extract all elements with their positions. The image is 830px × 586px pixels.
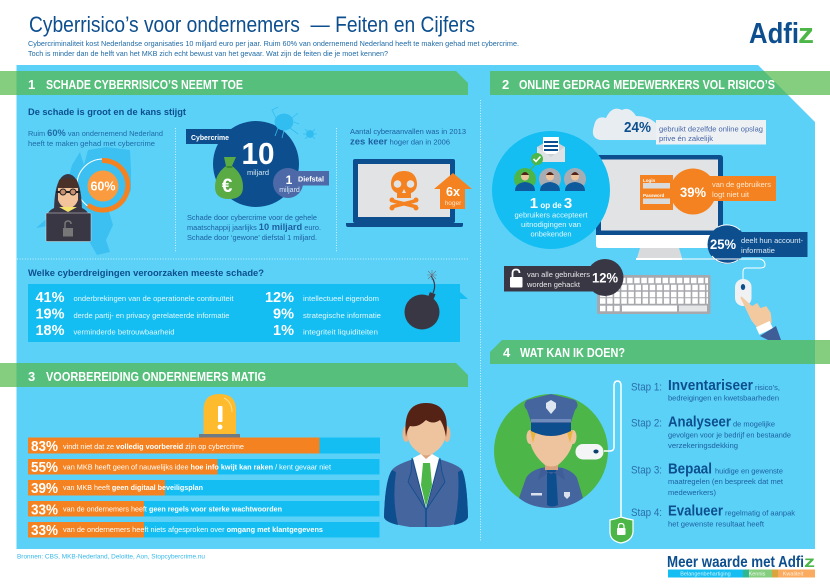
text: zes keer hoger xyxy=(350,127,466,148)
callout: 25% xyxy=(708,225,808,264)
illustration: businessman xyxy=(384,403,468,527)
dividers xyxy=(17,100,480,541)
stat list: derde partij- en privacy gerelateerde informatie xyxy=(74,311,230,320)
illustration: cloud with 24% xyxy=(593,109,766,144)
step 2: Stap 2: xyxy=(631,418,662,430)
circle: 1 op de 3: 1 op de 3 xyxy=(530,195,572,212)
bar: 33% klantgegevens xyxy=(28,522,380,539)
callout: 39%: Login xyxy=(643,178,655,183)
callout: 25%: informatie xyxy=(741,246,775,255)
step 3: medewerkers) xyxy=(668,488,717,497)
icon: money bag xyxy=(215,157,243,199)
bar: 33% wachtwoorden: 33% xyxy=(31,502,58,518)
bar: 83% xyxy=(28,438,380,455)
step 3 xyxy=(631,462,784,497)
background panel xyxy=(16,65,815,549)
logo: Adfiz: z xyxy=(798,18,814,50)
footer logo: Meer waarde met Adfiz: Belangenbehartiging xyxy=(680,572,731,578)
circle: diefstal 1 miljard: Diefstal xyxy=(298,176,324,184)
text: 60 percent: Ruim 60% van ondernemend Nederland xyxy=(28,128,163,139)
callout: 39% xyxy=(640,168,776,214)
logo: Adfiz: Adfi xyxy=(749,18,799,50)
footer logo: Meer waarde met Adfiz: Kwaliteit xyxy=(783,572,804,578)
icon: alarm light xyxy=(199,394,240,439)
circle: diefstal 1 miljard: miljard xyxy=(279,187,300,194)
step 4 xyxy=(631,504,795,528)
heading: schade: De schade is groot en de kans stijgt xyxy=(28,107,187,118)
illustration: cloud with 24%: 24% xyxy=(624,120,651,136)
icon: laptop with skull xyxy=(346,159,463,227)
footer logo: Meer waarde met Adfiz xyxy=(667,554,815,578)
bar chart: voorbereiding xyxy=(28,438,380,539)
banner: section 3 xyxy=(0,363,468,387)
icon: mouse and hand xyxy=(682,259,781,340)
banner: section 4 xyxy=(490,340,830,364)
banner: section 3: VOORBEREIDING ONDERNEMERS MATIG xyxy=(46,369,266,384)
intro text xyxy=(28,39,519,58)
panel: cyberdreigingen xyxy=(28,284,468,342)
stat list: strategische informatie xyxy=(303,311,381,320)
stat list: 12% xyxy=(265,290,294,306)
callout: 39%: logt niet uit xyxy=(712,190,750,199)
intro text: Cybercriminaliteit kost Nederlandse organisaties 10 miljard euro per jaar. Ruim 60% van ondernemend Nederland heeft te maken gehad met cybercrime. xyxy=(28,39,519,48)
source line: Bronnen: CBS, MKB-Nederland, Deloitte, Aon, Stopcybercrime.nu xyxy=(17,554,205,560)
circle: cybercrime 10 miljard: 10 xyxy=(242,136,274,171)
bar: 33% klantgegevens: van de ondernemers heeft niets afgesproken over omgang met klantgegevens xyxy=(63,525,323,534)
text: schade door cybercrime: maatschappij jaarlijks 10 miljard euro. xyxy=(187,222,321,233)
stat list xyxy=(35,290,381,339)
circle: 1 op de 3: uitnodigingen van xyxy=(521,220,581,229)
circle: 1 op de 3: gebruikers accepteert xyxy=(514,210,588,220)
callout: 39%: 39% xyxy=(680,184,707,200)
callout: 12%: worden gehackt xyxy=(526,280,581,289)
text: 60 percent xyxy=(28,128,163,148)
heading: cyberdreigingen: Welke cyberdreigingen veroorzaken meeste schade? xyxy=(28,268,264,279)
callout: 12%: 12% xyxy=(592,270,618,286)
step 3: huidige en gewenste xyxy=(715,466,783,476)
banner: section 2: ONLINE GEDRAG MEDEWERKERS VOL RISICO’S xyxy=(519,77,775,92)
banner: section 4: WAT KAN IK DOEN? xyxy=(520,345,625,360)
banner: section 1 xyxy=(0,71,468,95)
icon: hacker xyxy=(46,174,91,242)
bar: 55% xyxy=(28,459,380,476)
stat list: 18% xyxy=(35,323,65,339)
stat list: 1% xyxy=(273,323,294,339)
text: schade door cybercrime: Schade door cybercrime voor de gehele xyxy=(187,213,317,222)
callout: 25%: deelt hun account- xyxy=(741,236,803,245)
donut chart: 60% xyxy=(77,159,129,211)
title: Cyberrisico’s voor ondernemers — Feiten en Cijfers xyxy=(29,12,475,37)
connector line with mouse xyxy=(576,381,621,520)
bar: 39%: 39% xyxy=(31,481,58,497)
step 1: Stap 1: xyxy=(631,382,662,394)
text: schade door cybercrime: Schade door ‘gewone’ diefstal 1 miljard. xyxy=(187,233,317,242)
bar: 39% xyxy=(28,480,380,497)
circle: cybercrime 10 miljard: miljard xyxy=(247,168,269,177)
banner: section 4: 4 xyxy=(503,345,511,360)
step 3: maatregelen (en bespreek dat met xyxy=(668,477,784,486)
donut chart: 60%: 60% xyxy=(90,180,116,194)
illustration: cloud with 24%: gebruikt dezelfde online opslag xyxy=(659,124,763,134)
illustration: police officer xyxy=(494,394,608,508)
text: schade door cybercrime xyxy=(187,213,321,242)
circle: 1 op de 3 xyxy=(492,131,610,249)
bar: 39%: van MKB heeft geen digitaal beveiligsplan xyxy=(63,483,203,492)
stat list: 41% xyxy=(35,290,65,306)
icon: shield lock xyxy=(610,517,633,543)
step 2 xyxy=(631,414,791,450)
map: Nederland xyxy=(36,147,131,255)
callout: 12% xyxy=(504,259,624,296)
text: zes keer hoger: Aantal cyberaanvallen was in 2013 xyxy=(350,127,466,136)
circle: cybercrime 10 miljard xyxy=(186,121,299,207)
circle: diefstal 1 miljard: 1 xyxy=(286,173,293,187)
text: zes keer hoger: zes keer hoger dan in 2006 xyxy=(350,136,450,148)
footer logo: Meer waarde met Adfiz: z xyxy=(804,554,815,571)
bar: 33% klantgegevens: 33% xyxy=(31,523,58,539)
stat list: verminderde betrouwbaarheid xyxy=(74,328,174,336)
bar: 55%: 55% xyxy=(31,460,58,476)
callout: 39%: van de gebruikers xyxy=(712,180,771,189)
step 1 xyxy=(631,378,780,402)
bar: 33% wachtwoorden xyxy=(28,501,380,518)
banner: section 1: SCHADE CYBERRISICO’S NEEMT TOE xyxy=(46,77,243,92)
step 2: gevolgen voor je bedrijf en bestaande xyxy=(668,430,791,440)
bar: 55%: van MKB heeft geen of nauwelijks idee hoe info kwijt kan raken / kent gevaar niet xyxy=(63,462,332,472)
step 4: Evalueer xyxy=(668,504,723,520)
stat list: onderbrekingen van de operationele continuïteit xyxy=(74,294,234,303)
step 1: Inventariseer xyxy=(668,378,753,394)
icon: bugs xyxy=(272,107,317,139)
step 1: risico’s, xyxy=(755,383,780,392)
stat list: integriteit liquiditeiten xyxy=(303,328,378,336)
bar: 33% wachtwoorden: van de ondernemers heeft geen regels voor sterke wachtwoorden xyxy=(63,504,282,514)
arrow: 6x hoger: 6x xyxy=(446,185,460,199)
callout: 25%: 25% xyxy=(710,236,737,252)
stat list: 9% xyxy=(273,306,294,322)
callout: 39%: Password xyxy=(643,193,665,198)
arrow: 6x hoger: hoger xyxy=(445,200,462,207)
footer logo: Meer waarde met Adfiz: Meer waarde met Adfi xyxy=(667,554,804,571)
step 4: Stap 4: xyxy=(631,507,662,519)
bar: 83%: 83% xyxy=(31,439,58,455)
text: 60 percent: heeft te maken gehad met cybercrime xyxy=(28,139,155,148)
icons: three people xyxy=(514,168,586,191)
footer logo: Meer waarde met Adfiz: Kennis xyxy=(749,572,766,578)
circle: cybercrime 10 miljard: Cybercrime xyxy=(191,133,229,142)
step 2: verzekeringsdekking xyxy=(668,441,738,450)
step 3: Bepaal xyxy=(668,462,712,478)
step 2: Analyseer xyxy=(668,414,731,430)
callout: 12%: van alle gebruikers xyxy=(527,270,590,279)
arrow: 6x hoger xyxy=(434,173,472,209)
step 2: de mogelijke xyxy=(733,420,775,428)
illustration: monitor xyxy=(596,155,723,260)
icon: keyboard xyxy=(597,275,710,314)
circle: diefstal 1 miljard xyxy=(273,168,329,198)
circle: 1 op de 3: onbekenden xyxy=(530,230,572,238)
icon: money bag: € xyxy=(222,176,233,197)
banner: section 3: 3 xyxy=(28,369,35,384)
banner: section 2 xyxy=(490,71,830,95)
icon: check xyxy=(526,153,543,174)
stat list: 19% xyxy=(35,306,65,322)
banner: section 2: 2 xyxy=(502,77,509,92)
banner: section 1: 1 xyxy=(28,77,35,92)
intro text: Toch is minder dan de helft van het MKB zich echt bewust van het gevaar. Wat zijn de feiten die je moet kennen? xyxy=(28,49,388,58)
step 4: regelmatig of aanpak xyxy=(725,508,795,518)
illustration: cloud with 24%: prive én zakelijk xyxy=(659,134,713,143)
step 4: het gewenste resultaat heeft xyxy=(668,520,765,528)
bar: 83%: vindt niet dat ze volledig voorbereid zijn op cybercrime xyxy=(63,442,244,451)
step 1: bedreigingen en kwetsbaarheden xyxy=(668,394,779,402)
step 3: Stap 3: xyxy=(631,464,662,476)
icon: envelope xyxy=(537,137,565,162)
icon: bomb xyxy=(404,270,440,330)
stat list: intellectueel eigendom xyxy=(303,294,379,303)
